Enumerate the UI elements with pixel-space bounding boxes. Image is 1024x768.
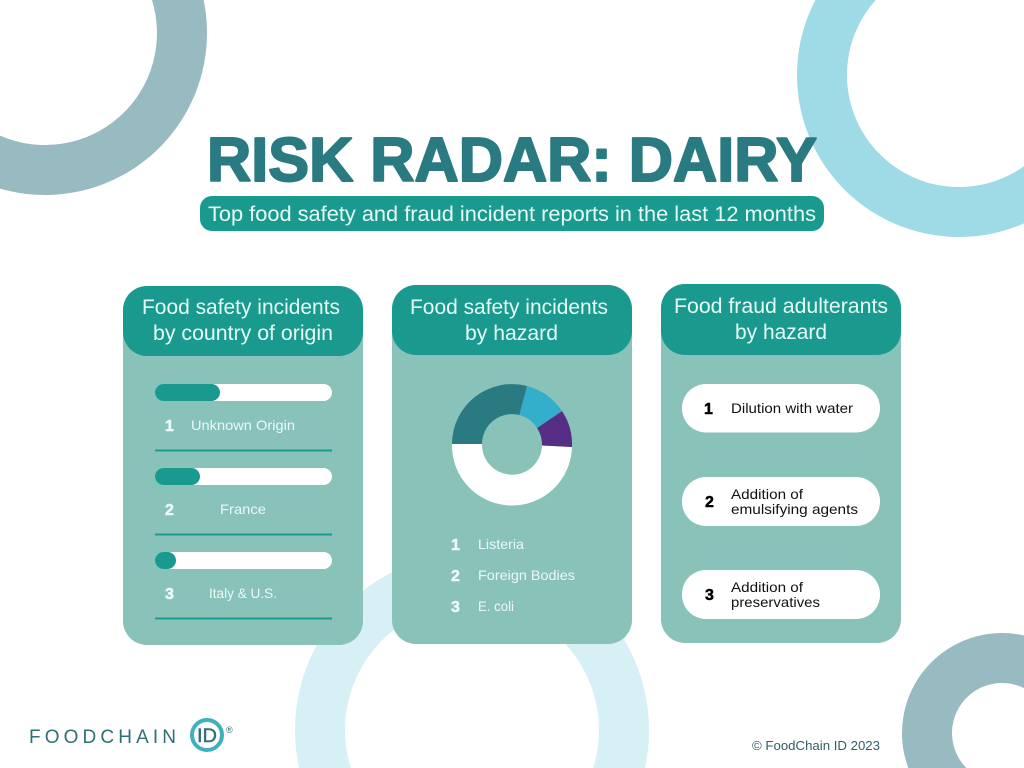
- decorative ring: top left: [0, 0, 207, 195]
- panel: incidents by hazard: [392, 285, 632, 644]
- panel heading: country of origin: Food safety incidents: [142, 296, 340, 319]
- panel: incidents by country of origin: [123, 286, 363, 645]
- pill 1: dilution with water: Dilution with water: [731, 400, 853, 416]
- bar row 2: France: 2: [165, 502, 174, 519]
- bar row 1: Unknown Origin: Unknown Origin: [191, 417, 295, 433]
- hazard ranking list: E. coli: [478, 598, 514, 614]
- logo: FoodChain ID: ®: [226, 725, 233, 735]
- panel heading: fraud adulterants: [661, 284, 901, 355]
- pill 1: dilution with water: 1: [704, 401, 713, 418]
- donut chart: [452, 384, 572, 506]
- hazard ranking list: [451, 536, 575, 616]
- panel heading: country of origin: [123, 286, 363, 356]
- hazard ranking list: 1: [451, 537, 460, 554]
- pill 3: preservatives: Addition of: [731, 579, 803, 595]
- hazard ranking list: Foreign Bodies: [478, 567, 575, 583]
- logo: FoodChain ID: FOODCHAIN: [29, 727, 176, 748]
- subtitle banner: [200, 196, 824, 231]
- bar row 1: Unknown Origin: [155, 384, 332, 452]
- bar row 2: France: [155, 468, 332, 536]
- pill 2: emulsifying agents: emulsifying agents: [731, 501, 858, 517]
- bar row 1: Unknown Origin: 1: [165, 418, 174, 435]
- panel heading: fraud adulterants: by hazard: [735, 321, 827, 344]
- bar row 3: Italy and U.S.: Italy & U.S.: [209, 585, 277, 601]
- pill 3: preservatives: 3: [705, 587, 714, 604]
- subtitle banner: Top food safety and fraud incident reports in the last 12 months: [208, 203, 816, 226]
- bar row 3: Italy and U.S.: 3: [165, 586, 174, 603]
- bar row 2: France: France: [220, 501, 266, 517]
- pill 2: emulsifying agents: [682, 477, 880, 526]
- panel heading: hazard: [392, 285, 632, 355]
- pill 3: preservatives: preservatives: [731, 594, 820, 610]
- panel heading: country of origin: by country of origin: [153, 322, 333, 345]
- decorative ring: bottom centre: [295, 553, 649, 768]
- hazard ranking list: 3: [451, 599, 460, 616]
- pill 2: emulsifying agents: Addition of: [731, 486, 803, 502]
- hazard ranking list: 2: [451, 568, 460, 585]
- copyright: © FoodChain ID 2023: [752, 739, 880, 753]
- panel: fraud adulterants by hazard: [661, 284, 901, 643]
- pill 3: preservatives: [682, 570, 880, 619]
- logo: FoodChain ID: ID: [197, 726, 217, 747]
- pill 2: emulsifying agents: 2: [705, 494, 714, 511]
- panel heading: hazard: Food safety incidents: [410, 296, 608, 319]
- panel heading: fraud adulterants: Food fraud adulterants: [674, 295, 888, 318]
- decorative ring: bottom right: [902, 633, 1024, 768]
- title: RISK RADAR: DAIRY: [207, 126, 817, 195]
- pill 1: dilution with water: [682, 384, 880, 432]
- decorative ring: top right: [797, 0, 1024, 237]
- bar row 3: Italy and U.S.: [155, 552, 332, 620]
- logo: FoodChain ID: [29, 720, 233, 750]
- panel heading: hazard: by hazard: [465, 322, 558, 345]
- hazard ranking list: Listeria: [478, 536, 524, 552]
